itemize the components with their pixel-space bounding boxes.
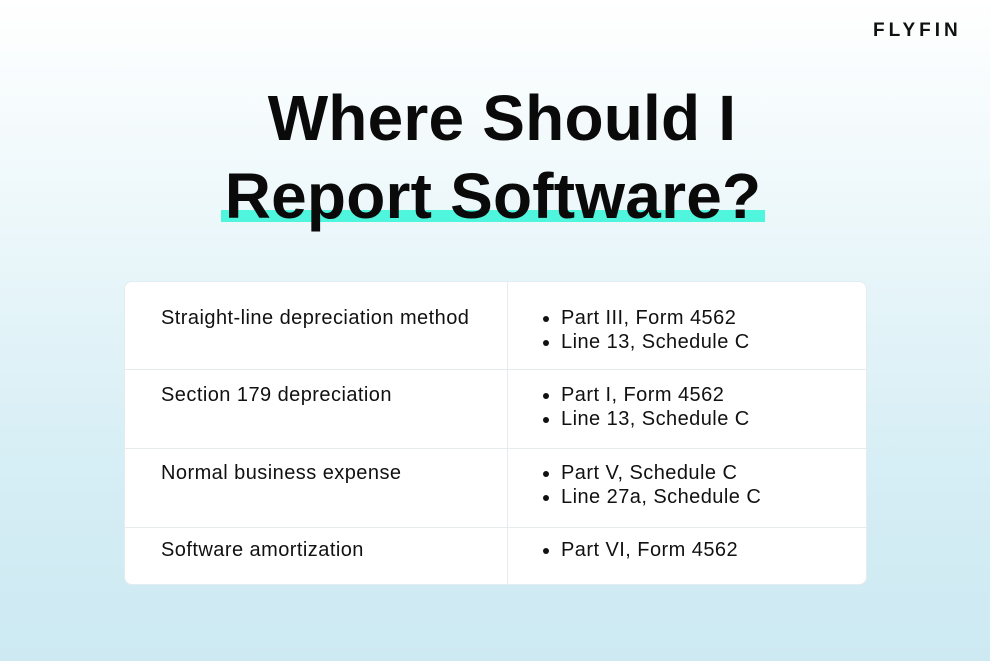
table: Part I, Form 4562 [561, 384, 724, 406]
row 2: Section 179 depreciation [161, 384, 392, 406]
table: Part V, Schedule C [561, 462, 737, 484]
table: Part III, Form 4562 [561, 307, 736, 329]
title: Where Should I [268, 82, 736, 154]
table: Line 13, Schedule C [561, 408, 750, 430]
table: Line 27a, Schedule C [561, 486, 761, 508]
table [124, 281, 867, 585]
table: Part VI, Form 4562 [561, 539, 738, 561]
title highlight line: Report Software? [225, 160, 761, 232]
logo: FLYFIN [873, 20, 962, 41]
row 3: Normal business expense [161, 462, 401, 484]
row 1: Straight-line depreciation method [161, 307, 469, 329]
table: Line 13, Schedule C [561, 331, 750, 353]
title [221, 82, 765, 232]
row 4: Software amortization [161, 539, 364, 561]
